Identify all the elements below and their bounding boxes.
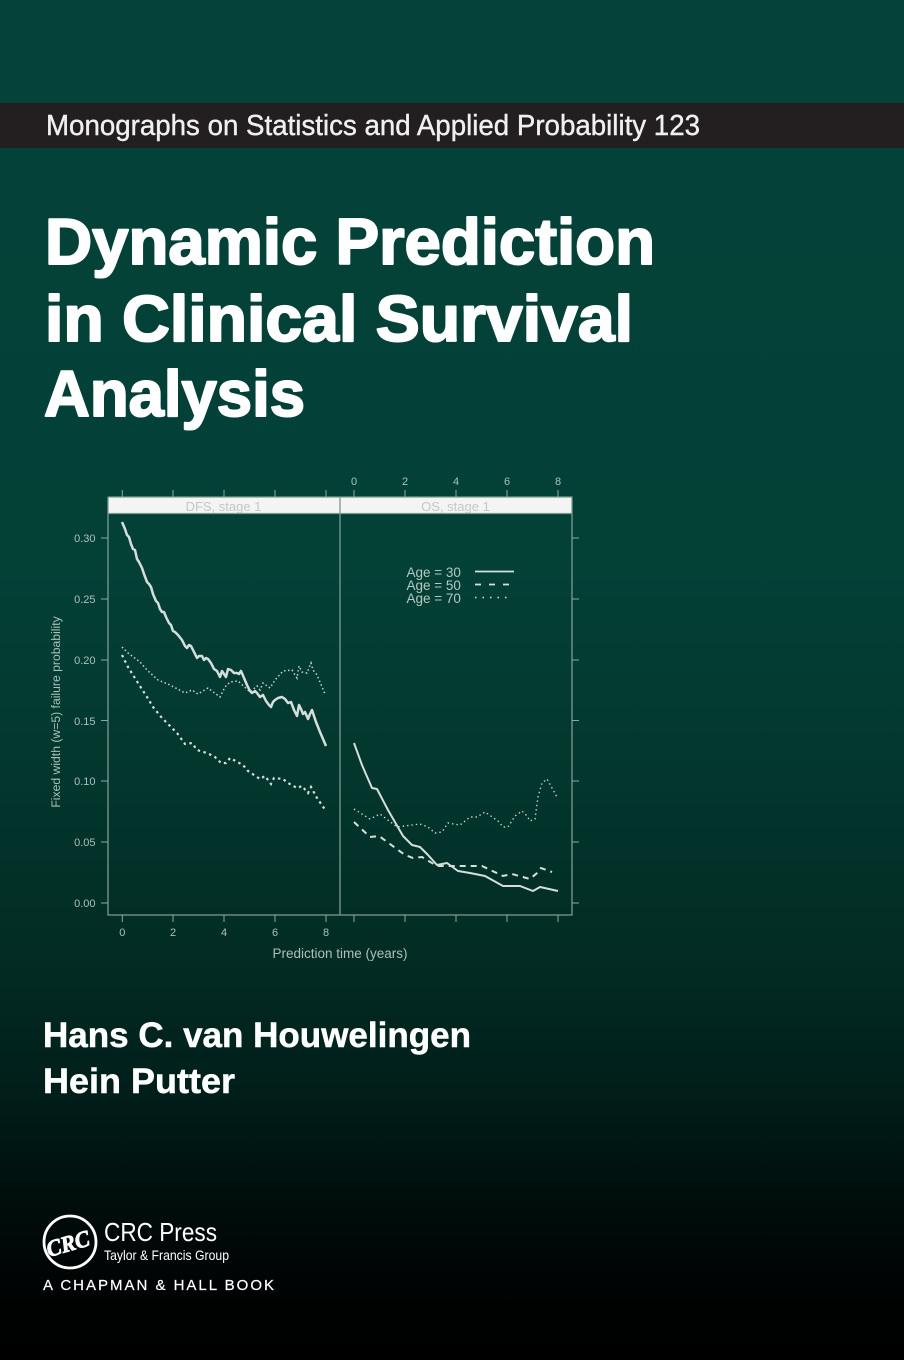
x axis labels top: 0 (351, 476, 357, 488)
x axis labels bottom (119, 927, 329, 939)
legend: Age = 50 (406, 578, 461, 593)
y axis labels (74, 533, 96, 910)
x axis title: Prediction time (years) (272, 946, 408, 961)
legend (406, 565, 514, 606)
curve: OS age 30 (354, 743, 558, 891)
curve: DFS age 30 (122, 522, 326, 746)
curve: DFS age 50 (122, 655, 326, 811)
y axis title: Fixed width (w=5) failure probability (49, 615, 63, 808)
axis ticks (101, 490, 579, 922)
title: in Clinical Survival (45, 282, 633, 355)
curve: OS age 50 (354, 822, 552, 879)
x axis labels top (351, 476, 561, 488)
panel strips (108, 497, 572, 514)
authors: Hein Putter (43, 1062, 235, 1101)
y axis labels: 0.20 (74, 655, 96, 667)
y axis labels: 0.30 (74, 533, 96, 545)
curve: OS age 70 (354, 779, 557, 833)
y axis labels: 0.00 (74, 898, 96, 910)
series banner (0, 103, 904, 148)
x axis labels top: 4 (453, 476, 459, 488)
curve: DFS age 70 (122, 647, 325, 697)
line chart (49, 476, 579, 961)
series banner: Monographs on Statistics and Applied Probability 123 (46, 110, 700, 142)
title (44, 205, 655, 430)
publisher name: CRC Press (104, 1217, 217, 1247)
x axis labels bottom: 4 (221, 927, 227, 939)
legend: Age = 70 (406, 591, 461, 606)
panel strips: DFS, stage 1 (186, 499, 261, 514)
icon: CRC circle (43, 1216, 96, 1268)
x axis labels top: 6 (504, 476, 510, 488)
publisher logo (43, 1216, 274, 1294)
x axis labels bottom: 2 (170, 927, 176, 939)
title: Analysis (44, 357, 305, 430)
panel strips: OS, stage 1 (421, 499, 490, 514)
x axis labels bottom: 0 (119, 927, 125, 939)
imprint: A CHAPMAN & HALL BOOK (43, 1277, 274, 1294)
title: Dynamic Prediction (45, 205, 655, 278)
x axis labels top: 2 (402, 476, 408, 488)
plot frame (108, 497, 572, 915)
publisher group: Taylor & Francis Group (104, 1247, 229, 1263)
y axis labels: 0.05 (74, 837, 96, 849)
y axis labels: 0.15 (74, 716, 96, 728)
legend: Age = 30 (406, 565, 461, 580)
y axis labels: 0.10 (74, 776, 96, 788)
authors (43, 1016, 471, 1101)
x axis labels top: 8 (555, 476, 561, 488)
x axis labels bottom: 6 (272, 927, 278, 939)
icon: CRC circle: CRC (43, 1226, 93, 1262)
x axis labels bottom: 8 (323, 927, 329, 939)
authors: Hans C. van Houwelingen (43, 1016, 471, 1055)
y axis labels: 0.25 (74, 594, 96, 606)
